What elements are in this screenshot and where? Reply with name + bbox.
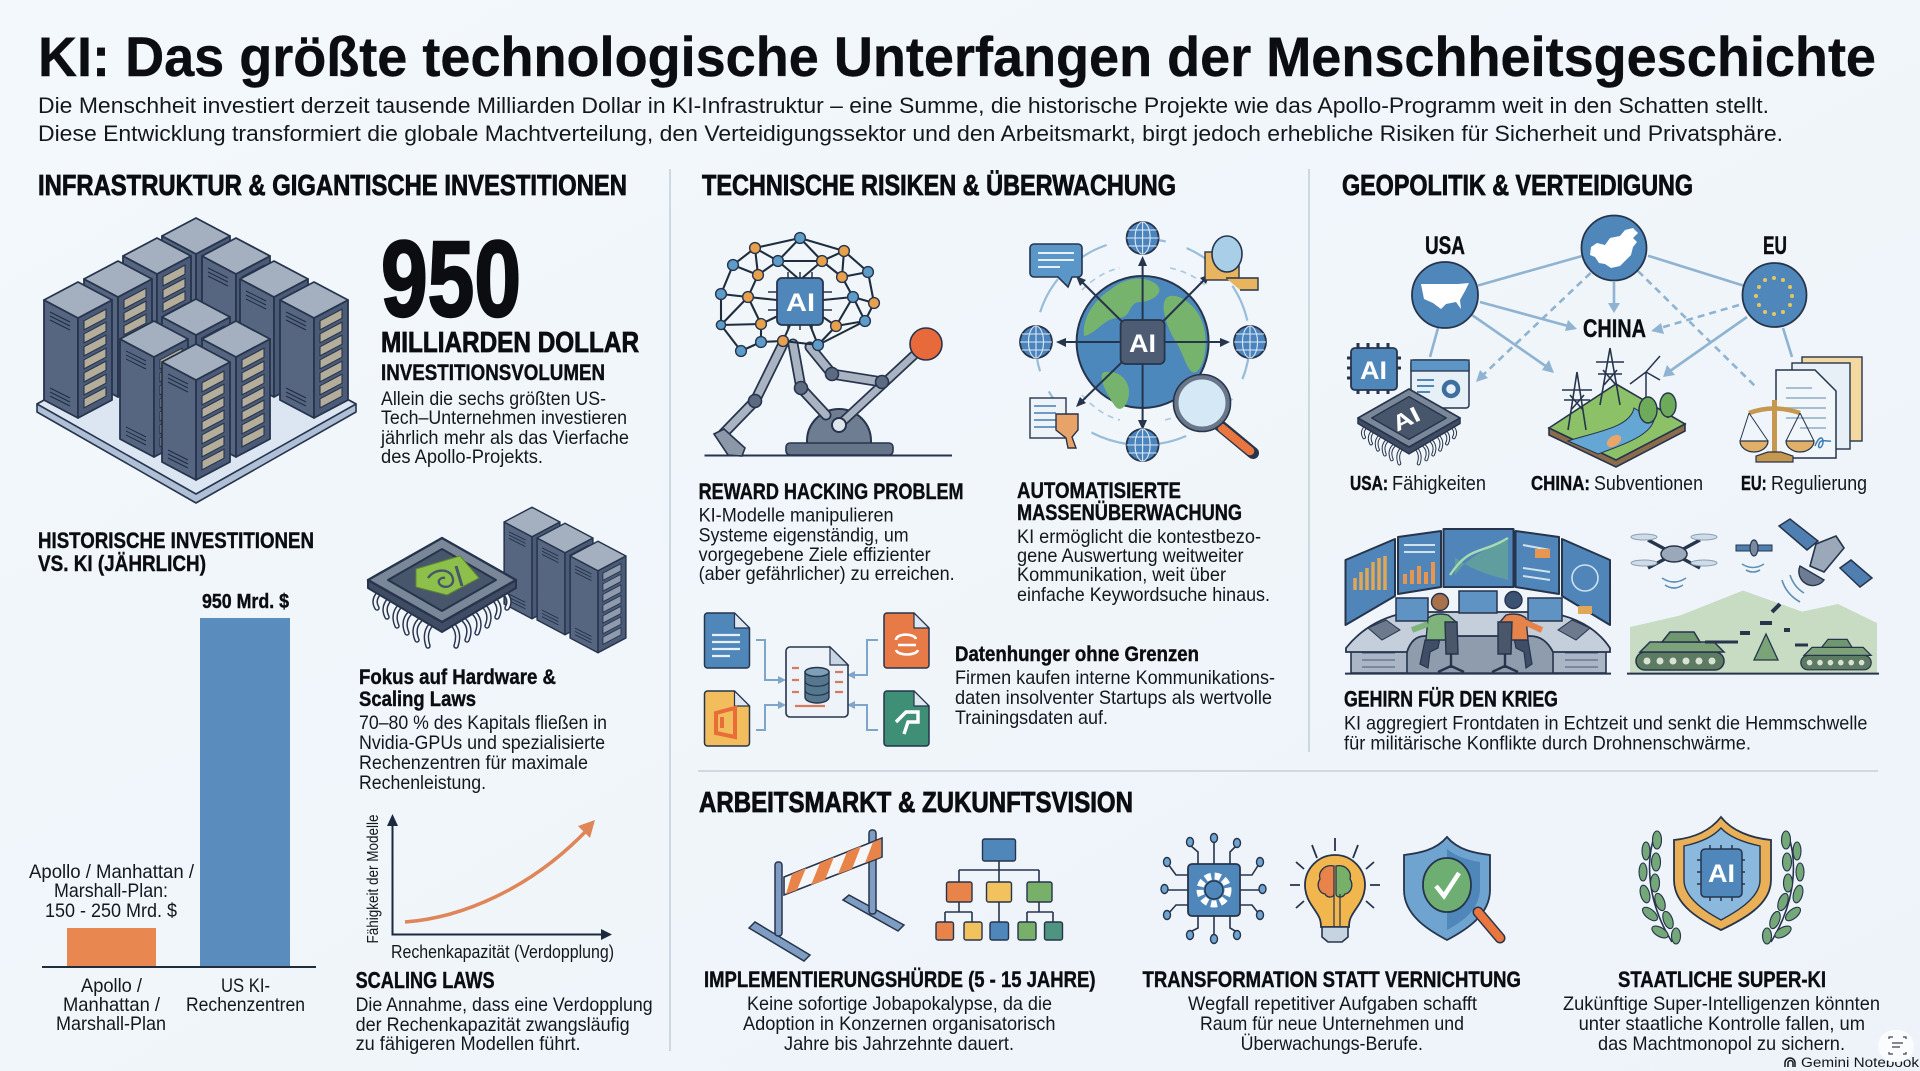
text: Massenüberwachung <box>1017 478 1270 606</box>
panel: Technische Risiken <box>699 169 1275 746</box>
text: Massenüberwachung: MASSENÜBERWACHUNG <box>1017 500 1242 525</box>
value label: Apollo <box>29 861 195 922</box>
heading: Technische Risiken: TECHNISCHE RISIKEN & ÜBERWACHUNG <box>702 169 1176 202</box>
stat description: Tech–Unternehmen investieren <box>381 407 627 429</box>
value label: Apollo: Marshall-Plan: <box>54 880 168 902</box>
axis label: Apollo: Apollo / <box>81 975 143 997</box>
stat description <box>380 388 629 468</box>
text: Staatliche Super-KI: STAATLICHE SUPER-KI <box>1618 967 1826 992</box>
diagram: power network USA China EU: USA <box>1425 232 1465 260</box>
line chart: scaling laws <box>365 814 614 962</box>
node: China <box>1582 216 1646 280</box>
labels: USA, China, EU: Subventionen <box>1594 473 1703 495</box>
text: Massenüberwachung: AUTOMATISIERTE <box>1017 478 1181 503</box>
stat description: jährlich mehr als das Vierfache <box>380 427 629 449</box>
text: Implementierungshürde: Adoption in Konzernen organisatorisch <box>743 1013 1056 1035</box>
icon: AI shield with laurels <box>1638 817 1805 944</box>
text: Fokus auf Hardware: 70–80 % des Kapitals fließen in <box>359 712 607 734</box>
text: Fokus auf Hardware <box>359 665 607 794</box>
title: KI: Das größte technologische Unterfangen der Menschheitsgeschichte <box>38 25 1876 88</box>
text: Gehirn für den Krieg: GEHIRN FÜR DEN KRIEG <box>1344 686 1558 712</box>
node: USA <box>1412 262 1478 328</box>
text: Fokus auf Hardware: Fokus auf Hardware & <box>359 665 556 689</box>
icon: lightbulb with brain <box>1290 838 1380 942</box>
icon: barrier <box>749 830 904 961</box>
text: Fokus auf Hardware: Scaling Laws <box>359 687 476 711</box>
chart heading: VS. KI (JÄHRLICH) <box>38 551 206 576</box>
icon: USA chips and software: AI <box>1360 357 1387 385</box>
axis label: US KI <box>186 975 305 1016</box>
text: Massenüberwachung: KI ermöglicht die kontestbezo- <box>1017 526 1261 548</box>
heading: Arbeitsmarkt: ARBEITSMARKT & ZUKUNFTSVISION <box>699 787 1133 819</box>
text: Reward Hacking: KI-Modelle manipulieren <box>699 504 894 526</box>
icon: robot pulling lever: AI <box>786 289 815 317</box>
text: Implementierungshürde: Keine sofortige Jobapokalypse, da die <box>747 993 1052 1015</box>
line chart: scaling laws: Fähigkeit der Modelle <box>365 814 382 944</box>
axis label: US KI: US KI- <box>221 975 270 997</box>
icon: mass surveillance globe: AI <box>1129 330 1156 358</box>
icon: drones, satellite and tanks <box>1627 519 1879 674</box>
text: Reward Hacking <box>699 479 964 585</box>
text: Reward Hacking: Systeme eigenständig, um <box>699 524 909 546</box>
labels: USA, China, EU: Regulierung <box>1771 473 1867 495</box>
icon: USA chips and software: AI <box>1388 401 1424 436</box>
labels: USA, China, EU: USA: <box>1350 473 1388 495</box>
icon: EU regulation scales and documents <box>1740 357 1862 462</box>
text: Implementierungshürde: IMPLEMENTIERUNGSHÜRDE (5 - 15 JAHRE) <box>704 967 1096 992</box>
subtitle <box>38 93 1783 146</box>
text: Scaling Laws: der Rechenkapazität zwangsläufig <box>356 1014 630 1036</box>
text: Staatliche Super-KI: unter staatliche Kontrolle fallen, um <box>1579 1013 1865 1035</box>
text: Gehirn für den Krieg <box>1344 686 1867 754</box>
heading: Geopolitik: GEOPOLITIK & VERTEIDIGUNG <box>1342 170 1693 202</box>
text: Fokus auf Hardware: Rechenleistung. <box>359 772 486 794</box>
text: Staatliche Super-KI <box>1563 967 1880 1055</box>
icon: robot pulling lever <box>704 233 952 456</box>
text: Massenüberwachung: gene Auswertung weitweiter <box>1017 545 1244 567</box>
text: Scaling Laws <box>356 967 653 1055</box>
panel: Arbeitsmarkt <box>699 787 1880 1055</box>
value label: Apollo: 150 - 250 Mrd. $ <box>45 900 177 922</box>
text: Gehirn für den Krieg: KI aggregiert Frontdaten in Echtzeit und senkt die Hemmschwelle <box>1344 712 1867 734</box>
node: EU <box>1742 263 1806 327</box>
icon: server farm <box>37 218 356 503</box>
bar: Apollo <box>67 928 156 966</box>
text: Massenüberwachung: Kommunikation, weit über <box>1017 564 1226 586</box>
panel: Geopolitik <box>1342 170 1879 754</box>
text: Transformation: Überwachungs-Berufe. <box>1241 1033 1423 1055</box>
stat label: MILLIARDEN DOLLAR <box>381 327 639 359</box>
value label: 950: 950 Mrd. $ <box>202 591 289 613</box>
panel: Infrastruktur <box>29 170 653 1055</box>
stat description: des Apollo-Projekts. <box>381 446 543 468</box>
big number 950: 950 <box>381 218 521 339</box>
subtitle: Die Menschheit investiert derzeit tausende Milliarden Dollar in KI-Infrastruktur – eine Summe, die historische Projekte wie das Apollo-Programm weit in den Schatten stellt. <box>38 93 1769 118</box>
line chart: scaling laws: Rechenkapazität (Verdopplung) <box>391 942 614 962</box>
axis label: Apollo: Marshall-Plan <box>56 1013 166 1035</box>
bar chart: historische Investitionen vs. KI <box>29 528 316 1035</box>
text: Fokus auf Hardware: Rechenzentren für maximale <box>359 752 588 774</box>
axis label: Apollo <box>56 975 166 1035</box>
text: Reward Hacking: vorgegebene Ziele effizienter <box>699 544 931 566</box>
text: Scaling Laws: SCALING LAWS <box>356 967 495 993</box>
bar: US KI-Rechenzentren <box>200 618 290 966</box>
heading: Infrastruktur: INFRASTRUKTUR & GIGANTISCHE INVESTITIONEN <box>38 170 627 202</box>
text: Datenhunger <box>955 643 1275 729</box>
text: Staatliche Super-KI: das Machtmonopol zu sichern. <box>1598 1033 1845 1055</box>
text: Massenüberwachung: einfache Keywordsuche hinaus. <box>1017 584 1270 606</box>
text: Transformation <box>1142 967 1521 1055</box>
watermark: Gemini Notebook: Gemini Notebook <box>1801 1055 1919 1070</box>
text: Scaling Laws: zu fähigeren Modellen führt. <box>356 1033 581 1055</box>
value label: Apollo: Apollo / Manhattan / <box>29 861 195 883</box>
icon: AI shield with laurels: AI <box>1708 860 1735 888</box>
text: Datenhunger: Trainingsdaten auf. <box>955 707 1108 729</box>
icon: data files flowing into database <box>704 613 929 746</box>
text: Staatliche Super-KI: Zukünftige Super-Intelligenzen könnten <box>1563 993 1880 1015</box>
icon: military control room <box>1345 529 1611 674</box>
stat label: INVESTITIONSVOLUMEN <box>381 360 605 385</box>
diagram: power network USA China EU: EU <box>1763 232 1787 260</box>
text: Scaling Laws: Die Annahme, dass eine Verdopplung <box>356 994 653 1016</box>
text: Reward Hacking: (aber gefährlicher) zu erreichen. <box>699 563 955 585</box>
icon: organisation chart <box>936 839 1062 940</box>
text: Implementierungshürde: Jahre bis Jahrzehnte dauert. <box>784 1033 1014 1055</box>
text: Transformation: TRANSFORMATION STATT VERNICHTUNG <box>1142 967 1521 992</box>
text: Transformation: Raum für neue Unternehmen und <box>1200 1013 1464 1035</box>
labels: USA, China, EU: EU: <box>1741 473 1767 495</box>
text: Datenhunger: Datenhunger ohne Grenzen <box>955 643 1199 666</box>
icon: GPU chip and racks <box>368 507 626 653</box>
icon: scan button <box>1878 1030 1914 1062</box>
chart heading: HISTORISCHE INVESTITIONEN <box>38 528 314 553</box>
icon: China energy landscape <box>1549 348 1685 467</box>
text: Datenhunger: daten insolventer Startups als wertvolle <box>955 687 1272 709</box>
text: Fokus auf Hardware: Nvidia-GPUs und spezialisierte <box>359 732 605 754</box>
labels: USA, China, EU <box>1350 473 1867 495</box>
axis <box>42 966 316 968</box>
diagram: power network USA China EU: CHINA <box>1583 315 1646 343</box>
icon: shield with checkmark <box>1404 837 1500 940</box>
stat description: Allein die sechs größten US- <box>381 388 606 410</box>
text: Implementierungshürde <box>704 967 1096 1055</box>
text: Datenhunger: Firmen kaufen interne Kommunikations- <box>955 667 1275 689</box>
labels: USA, China, EU: CHINA: <box>1531 473 1590 495</box>
axis label: Apollo: Manhattan / <box>63 994 161 1016</box>
text: Transformation: Wegfall repetitiver Aufgaben schafft <box>1188 993 1478 1015</box>
chart heading <box>38 528 314 576</box>
stat label <box>381 327 639 385</box>
icon: mass surveillance globe <box>1020 222 1266 461</box>
text: Gehirn für den Krieg: für militärische Konflikte durch Drohnenschwärme. <box>1344 732 1751 754</box>
labels: USA, China, EU: Fähigkeiten <box>1392 473 1486 495</box>
icon: circuit gear <box>1161 834 1266 944</box>
icon: USA chips and software <box>1347 343 1469 464</box>
diagram: power network USA China EU <box>1412 216 1806 386</box>
text: Reward Hacking: REWARD HACKING PROBLEM <box>699 479 964 504</box>
subtitle: Diese Entwicklung transformiert die globale Machtverteilung, den Verteidigungssektor und den Arbeitsmarkt, birgt jedoch erhebliche Risiken für Sicherheit und Privatsphäre. <box>38 121 1783 146</box>
axis label: US KI: Rechenzentren <box>186 994 305 1016</box>
